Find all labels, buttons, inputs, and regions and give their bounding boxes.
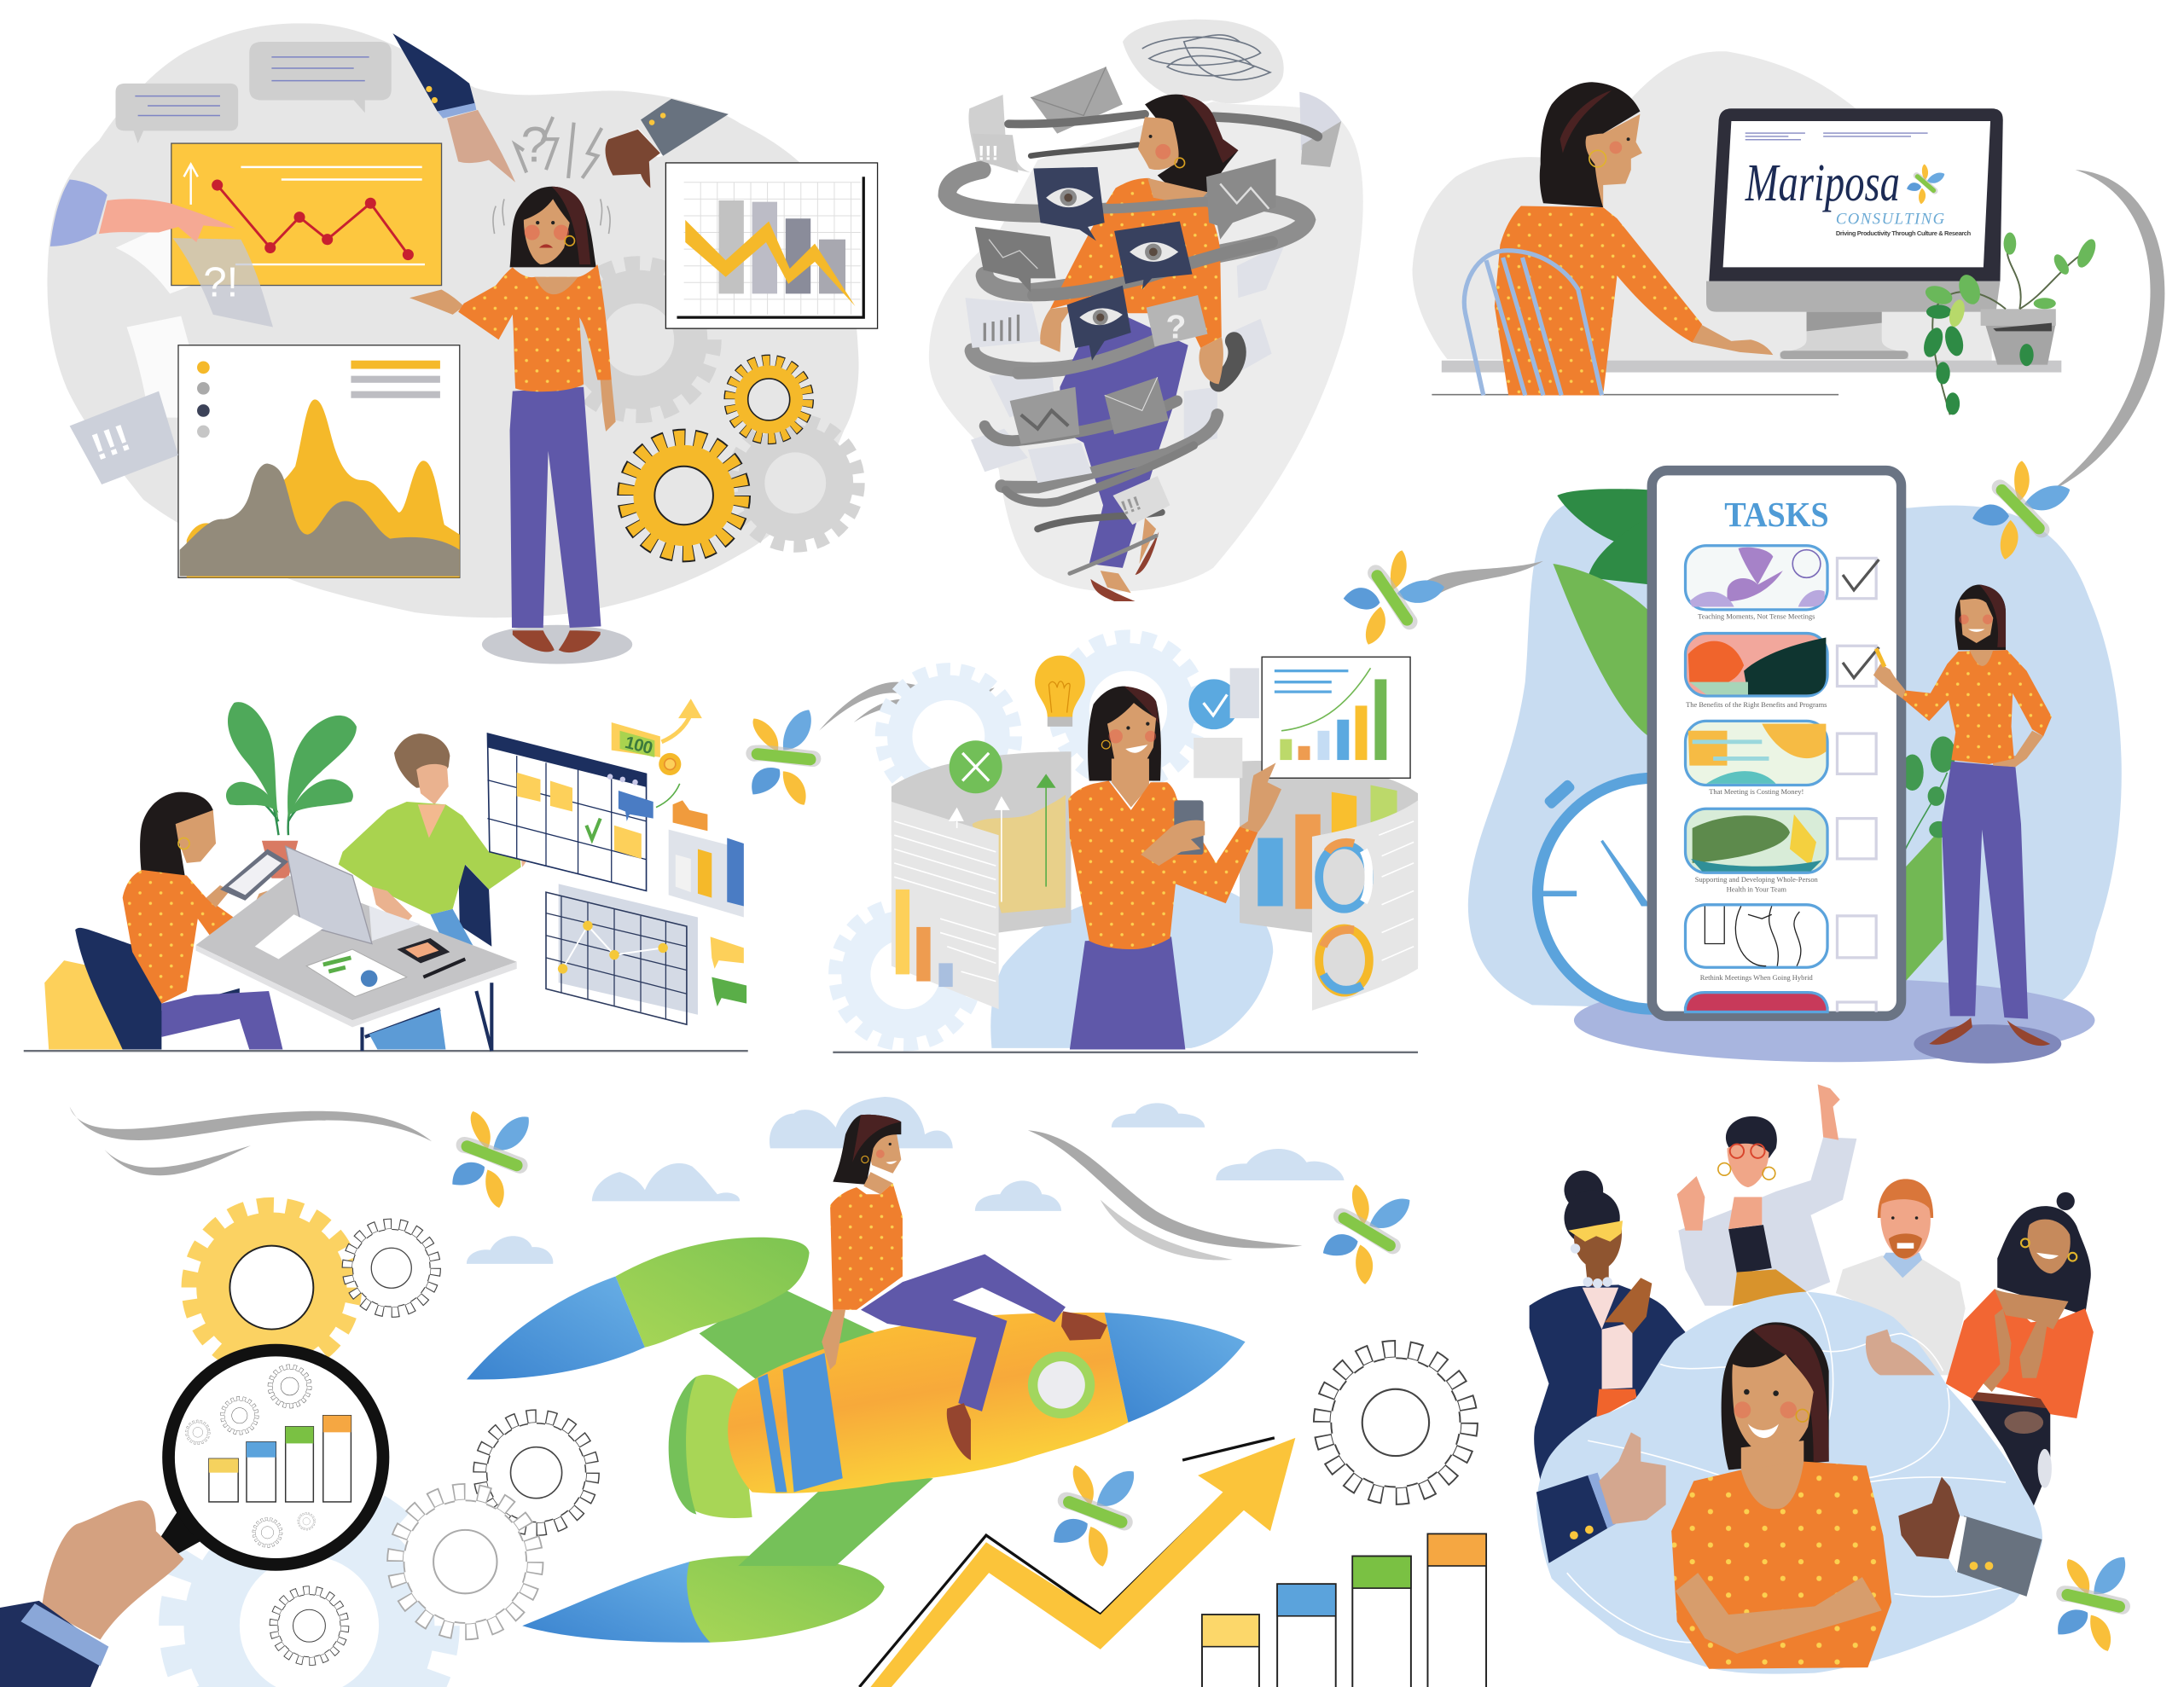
gray gears xyxy=(568,270,853,541)
task row 1: Teaching Moments, Not Tense Meetings xyxy=(1698,612,1815,620)
logo wordmark: Mariposa xyxy=(1745,154,1900,212)
clouds xyxy=(467,1097,1345,1264)
stopwatch xyxy=(1537,778,1769,1009)
woman in tornado xyxy=(1040,95,1238,601)
hand with sleeve xyxy=(0,1500,184,1687)
gray paper with question xyxy=(172,238,273,328)
tag 100 with arrow xyxy=(612,699,702,808)
gray outline gear xyxy=(395,1492,535,1632)
central woman xyxy=(1671,1322,1891,1669)
papers and calculator xyxy=(255,914,465,997)
potted plant xyxy=(1920,233,2100,415)
check and X badges xyxy=(950,679,1239,793)
notes: ? xyxy=(1166,310,1186,346)
bar caps xyxy=(1202,1533,1486,1647)
speech bubbles xyxy=(116,42,392,143)
panel: data review center xyxy=(833,643,1418,1052)
right cylinder panels xyxy=(1240,761,1418,1011)
panel: tasks phone xyxy=(1468,471,2122,1064)
yellow line chart xyxy=(171,143,442,286)
rocket xyxy=(467,1238,1246,1643)
blue blob xyxy=(990,881,1273,1048)
area chart card xyxy=(178,345,460,577)
question mark: ? xyxy=(521,117,549,172)
mini chart card xyxy=(1262,657,1410,778)
notes: !!! xyxy=(978,142,999,165)
ground line xyxy=(833,1052,1418,1053)
task row 3 xyxy=(1686,721,1827,796)
grid bar chart xyxy=(665,163,878,328)
pale gears xyxy=(841,643,1195,1038)
notes xyxy=(965,134,1276,525)
blue blob xyxy=(1468,501,2122,1016)
white paper shape xyxy=(116,224,209,418)
chair xyxy=(75,928,240,1050)
motion trail xyxy=(2050,170,2164,491)
envelope and note xyxy=(1194,668,1259,778)
gray blob xyxy=(1413,51,1992,365)
person raising thumb xyxy=(1677,1084,1856,1306)
eye notes xyxy=(1033,167,1193,361)
envelope top xyxy=(1031,67,1123,134)
grid line chart xyxy=(546,884,698,1024)
butterfly by phone xyxy=(1963,452,2073,572)
phone xyxy=(1652,471,1902,1016)
pointing hand left xyxy=(50,180,235,246)
person right xyxy=(1946,1192,2094,1506)
pointing hand top xyxy=(392,33,515,183)
pale gear xyxy=(184,1500,434,1687)
ground ellipse xyxy=(1574,978,2095,1062)
left cylinder panels xyxy=(892,751,1072,1009)
woman with phone xyxy=(1068,687,1281,1050)
backpack xyxy=(44,960,123,1050)
leaves xyxy=(1553,489,1955,982)
panel: monitor with Mariposa logo xyxy=(1413,51,2164,491)
panel: office scene xyxy=(24,699,748,1051)
ribbons xyxy=(968,92,1341,472)
panel: rocket growth xyxy=(0,1097,1486,1687)
person with beard xyxy=(1836,1179,1966,1375)
thumb up left xyxy=(1536,1432,1666,1563)
tablet xyxy=(220,849,288,901)
thumb up right xyxy=(1898,1477,2042,1597)
growth arrow xyxy=(859,1438,1295,1687)
task row 1 xyxy=(1686,546,1827,620)
woman at monitor xyxy=(1495,82,1773,395)
thumb hand of beard person xyxy=(1866,1330,1935,1375)
stress marks xyxy=(515,117,601,178)
plant xyxy=(226,702,357,878)
logo butterfly xyxy=(1903,161,1945,208)
desk xyxy=(196,876,517,1051)
logo subtitle: CONSULTING xyxy=(1836,211,1945,229)
small notes xyxy=(673,800,746,1006)
task row 4: Supporting and Developing Whole-Person xyxy=(1695,875,1819,884)
small bar chart xyxy=(669,830,744,917)
seated woman xyxy=(123,792,282,1050)
woman confused xyxy=(410,187,632,664)
chair xyxy=(1464,251,1602,395)
notes: !!! xyxy=(1118,491,1144,519)
background blob xyxy=(48,23,859,617)
butterflies xyxy=(452,1111,1411,1567)
butterfly with trail above phone xyxy=(1330,539,1543,662)
bars xyxy=(1202,1533,1486,1687)
task row 3: That Meeting is Costing Money! xyxy=(1709,787,1804,796)
task row 4: Health in Your Team xyxy=(1727,884,1786,893)
woman with pencil xyxy=(1873,584,2052,1046)
lightbulb xyxy=(1035,656,1085,727)
exclamation note xyxy=(70,391,178,484)
task row 5 xyxy=(1686,905,1827,982)
task row 4 xyxy=(1686,809,1827,893)
outline gears xyxy=(274,1224,1469,1661)
donut charts xyxy=(1319,843,1369,993)
task row 2: The Benefits of the Right Benefits and Programs xyxy=(1686,700,1827,709)
ground line xyxy=(24,1050,748,1052)
panel: tornado of tasks xyxy=(929,20,1363,601)
tag 100 with arrow: 100 xyxy=(623,733,654,758)
logo tagline: Driving Productivity Through Culture & Research xyxy=(1836,229,1972,237)
task row 6 xyxy=(1686,993,1827,1012)
laptop xyxy=(286,846,421,944)
yellow gear xyxy=(196,1212,347,1363)
thumbs down hand xyxy=(606,99,729,188)
checkboxes xyxy=(1837,558,1879,1012)
woman on rocket xyxy=(822,1115,1107,1460)
woman's shadow xyxy=(1914,1024,2061,1064)
panel: overwhelmed by data xyxy=(48,23,878,664)
seated colleague xyxy=(339,733,546,947)
gray paper with question: ?! xyxy=(203,260,238,306)
monitor xyxy=(1706,108,2003,359)
desk xyxy=(1432,361,2061,395)
tornado blob xyxy=(929,101,1363,592)
butterfly lower right xyxy=(2048,1551,2137,1657)
blue globe xyxy=(1536,1292,2042,1674)
calendar xyxy=(487,733,653,890)
task row 2 xyxy=(1686,634,1827,709)
butterfly with trail center xyxy=(734,682,995,817)
magnifier xyxy=(146,1350,383,1566)
yellow gears xyxy=(630,362,805,550)
swirl bands behind xyxy=(947,114,1317,383)
TASKS heading: TASKS xyxy=(1724,496,1829,534)
scribble thought xyxy=(1123,20,1284,103)
exclamation note: !!! xyxy=(86,416,136,469)
task row 5: Rethink Meetings When Going Hybrid xyxy=(1700,973,1814,982)
trails xyxy=(70,1106,1303,1261)
panel: team applause xyxy=(1530,1084,2137,1674)
swirl bands front xyxy=(985,202,1272,573)
person left xyxy=(1530,1171,1686,1481)
